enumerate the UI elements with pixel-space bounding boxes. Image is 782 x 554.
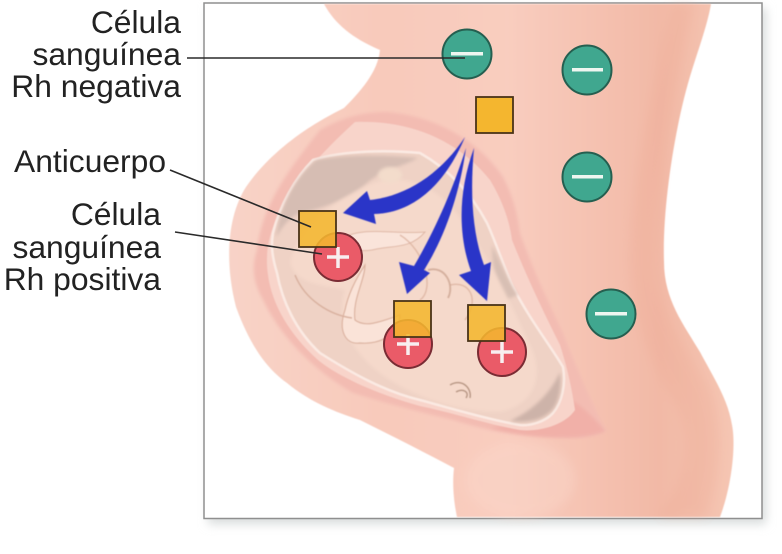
fetus — [290, 167, 537, 412]
blood cell: Rh negative right upper — [562, 46, 612, 94]
leader line: Rh positive cell — [175, 232, 322, 254]
body silhouette — [229, 4, 734, 517]
label: Rh negative blood cell — [11, 4, 181, 104]
panel shadow — [208, 8, 766, 524]
label: Rh positive blood cell — [4, 196, 161, 297]
sac: grey fluid top — [276, 156, 418, 238]
blood cell: Rh positive left — [314, 233, 362, 281]
body shading: right back — [630, 4, 719, 517]
label: Rh positive blood cell: Célula — [71, 196, 161, 232]
blood cell: Rh negative right middle — [562, 152, 612, 202]
arrow: antibodies to left cell — [343, 137, 465, 224]
panel: illustration frame — [204, 3, 762, 518]
arrow: antibodies to right cell — [459, 148, 491, 301]
leader line: antibody — [170, 170, 311, 227]
antibody: maternal square — [476, 97, 513, 133]
label: Rh negative blood cell: Célula — [91, 4, 181, 40]
label: Rh negative blood cell: Rh negativa — [11, 68, 181, 104]
amniotic sac — [272, 151, 564, 425]
leader line: Rh negative cell — [187, 57, 465, 59]
illustration: pregnant body — [229, 4, 734, 518]
uterus — [254, 112, 606, 438]
label: Rh positive blood cell: Rh positiva — [4, 261, 161, 297]
body shading: thigh highlight — [465, 442, 575, 518]
sac: grey fluid lower right — [510, 372, 561, 422]
blood cell: Rh positive right — [478, 328, 526, 376]
blood cell: Rh negative top — [442, 30, 492, 78]
antibody: attached middle — [394, 301, 431, 337]
label: Rh negative blood cell: sanguínea — [32, 36, 181, 72]
antibody: attached left — [299, 211, 336, 247]
blood cell: Rh positive middle — [384, 320, 432, 368]
cervix — [490, 395, 605, 437]
blood cell: Rh negative right lower — [586, 290, 636, 338]
label: Rh positive blood cell: sanguínea — [12, 229, 161, 265]
label: antibody: Anticuerpo — [14, 143, 166, 179]
antibody: attached right — [468, 305, 505, 341]
arrow: antibodies to middle cell — [399, 148, 466, 294]
